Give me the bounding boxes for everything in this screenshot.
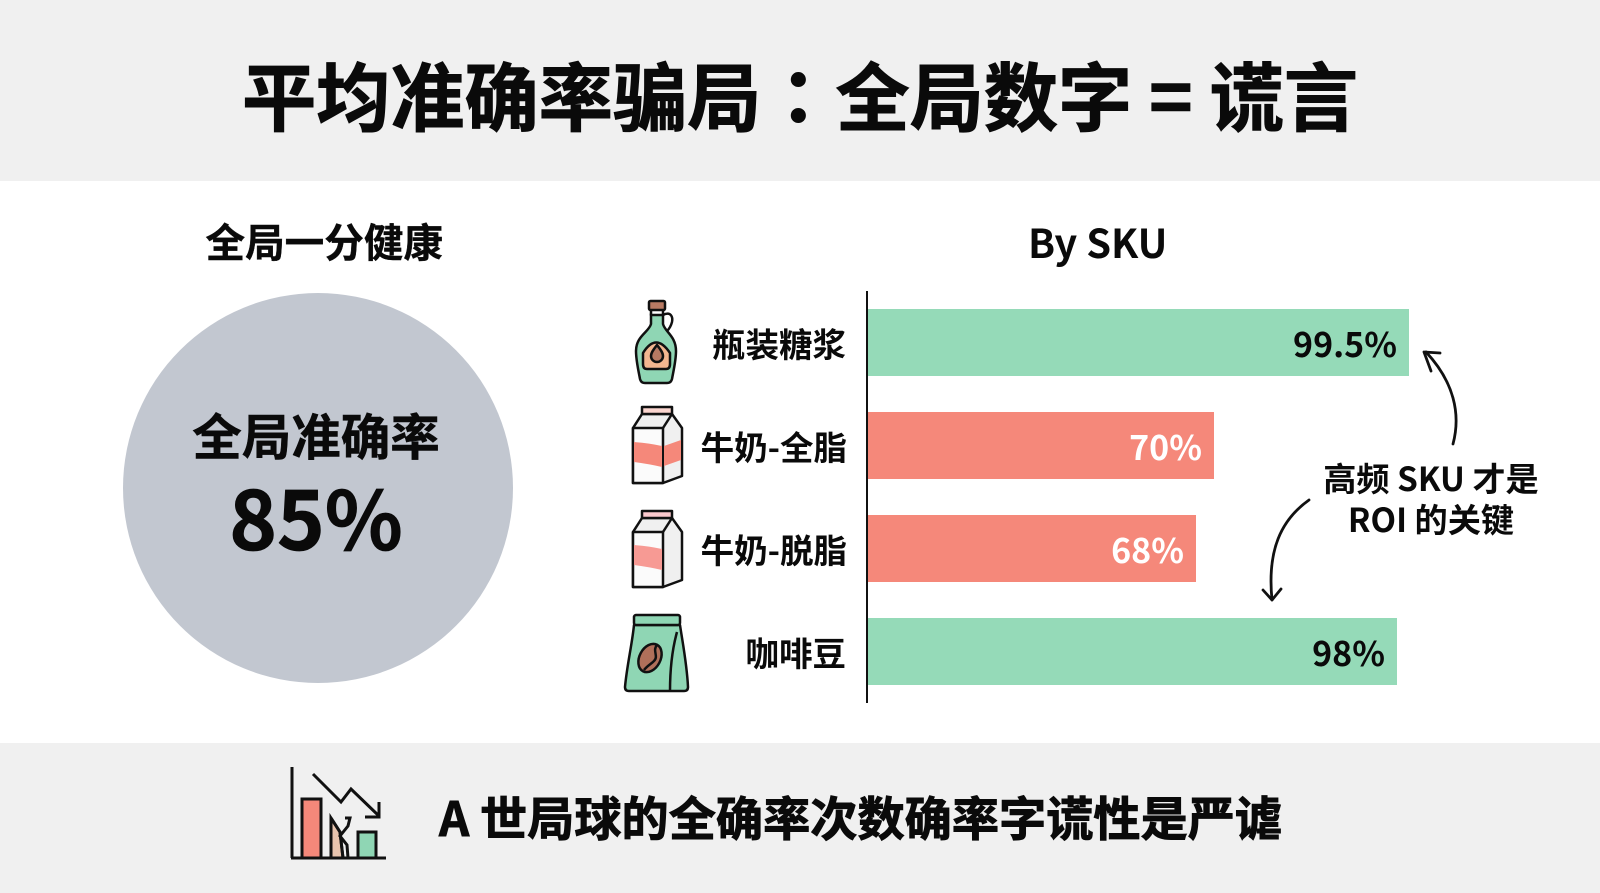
value: coffee: 98% — [1312, 627, 1385, 676]
icon: coffee bag — [624, 614, 690, 692]
label: whole milk: 牛奶-全脂 — [701, 421, 847, 470]
header band — [0, 0, 1600, 181]
bar: skim milk — [868, 515, 1196, 582]
circle label: 全局准确率 — [192, 399, 440, 470]
title: 平均准确率骗局：全局数字 = 谎言 — [242, 40, 1358, 147]
value: skim milk: 68% — [1111, 524, 1184, 573]
value: whole milk: 70% — [1129, 421, 1202, 470]
bar: coffee — [868, 618, 1397, 685]
left heading: 全局一分健康 — [206, 212, 443, 269]
icon: syrup bottle — [634, 300, 678, 384]
arrow: callout to coffee bar — [1262, 498, 1310, 602]
icon: skim milk carton — [632, 510, 684, 588]
icon: whole milk carton — [632, 406, 684, 484]
label: syrup: 瓶装糖浆 — [712, 318, 846, 366]
callout text — [1323, 452, 1539, 542]
panel: global accuracy circle — [123, 293, 513, 683]
icon: falling bar chart — [290, 767, 386, 860]
label: skim milk: 牛奶-脱脂 — [701, 524, 847, 573]
footer band — [0, 743, 1600, 893]
footer text: A 世局球的全确率次数确率字谎性是严谑 — [439, 781, 1282, 850]
label: coffee: 咖啡豆 — [746, 627, 846, 676]
bar: syrup — [868, 309, 1409, 376]
circle value: 85% — [229, 457, 403, 574]
right heading: By SKU — [1028, 213, 1167, 270]
callout text: ROI 的关键 — [1348, 492, 1514, 542]
bar: whole milk — [868, 412, 1214, 479]
value: syrup: 99.5% — [1293, 318, 1397, 367]
axis line — [866, 291, 868, 703]
callout text: 高频 SKU 才是 — [1323, 452, 1539, 500]
arrow: callout to syrup bar — [1422, 350, 1458, 446]
